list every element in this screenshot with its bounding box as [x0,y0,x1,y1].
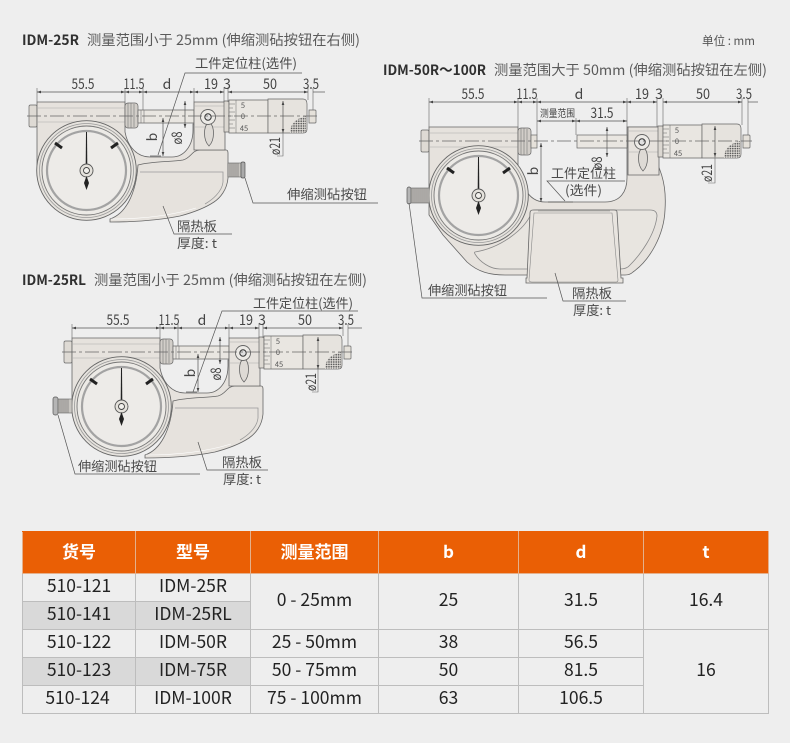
callout: heat shield: 隔热板 [177,216,217,235]
specification table: 75 - 100mm [267,685,362,710]
callout: heat shield: 厚度: t [573,300,611,319]
dimensions: 3.5 [736,84,752,104]
specification table: 25 [439,587,458,612]
dimensions: 50 [696,84,710,104]
specification table: 型号 [176,538,210,563]
callout: locating post: (选件) [565,180,602,199]
callout: retract button [409,203,547,299]
specification table: 56.5 [564,629,598,654]
diagrams: three micrometer drawings with dimensions [22,30,767,488]
dimensions: 31.5 [590,103,614,123]
dimensions: 19 [239,310,253,330]
dimensions: ø8 [587,156,607,170]
micrometer body: 5 [276,336,280,347]
specification table: 货号 [62,538,96,563]
callout: retract button: 伸缩测砧按钮 [287,184,367,203]
dimensions: 测量范围 [540,105,575,120]
specification table: IDM-75R [159,657,227,682]
callout: retract button [58,415,200,475]
dimensions: 3 [258,310,266,330]
dimensions: 50 [298,310,312,330]
dimensions [27,74,325,156]
heading: IDM-25R: 测量范围小于 25mm (伸缩测砧按钮在右侧) [87,30,360,50]
dimensions: ø21 [265,137,285,155]
dimensions: b [180,369,200,377]
specification table: 81.5 [564,657,598,682]
specification table: IDM-25RL [154,601,232,626]
callout: heat shield [555,273,626,319]
dimensions: b [142,133,162,141]
micrometer body: 45 [275,359,283,370]
micrometer body: 5 [675,125,679,136]
dimensions: 19 [635,84,649,104]
specification table: 16 [696,657,716,682]
specification table: 510-141 [47,601,111,626]
callout: locating post: 工件定位柱 [551,163,616,182]
micrometer body: 0 [675,136,679,147]
dimensions: 55.5 [106,310,130,330]
micrometer body: 45 [240,123,248,134]
specification table: d [576,538,586,563]
specification table: 38 [439,629,458,654]
unit label: 单位 : mm [702,32,755,49]
callout: heat shield: 隔热板 [572,283,612,302]
heading: IDM-50R to 100R: IDM-50R～100R [383,60,486,80]
callout: locating post [186,293,358,392]
dimensions: d [198,310,206,330]
dimensions [62,310,362,392]
callout: heat shield [198,442,268,488]
dimensions: b [523,167,543,175]
specification table: 50 [439,657,458,682]
specification table: 63 [439,685,458,710]
heading: IDM-25RL: 测量范围小于 25mm (伸缩测砧按钮在左侧) [94,270,367,290]
specification table: 510-124 [45,685,110,710]
micrometer body [29,99,316,222]
specification table: 25 - 50mm [272,629,357,654]
specification table: 510-121 [47,573,111,598]
dimensions: 3.5 [303,74,319,94]
callout: locating post: 工件定位柱(选件) [195,53,297,72]
specification table: 510-122 [47,629,111,654]
dimensions: ø8 [167,131,187,144]
dimensions: 19 [204,74,218,94]
diagram: IDM-25R [22,30,378,252]
dimensions: 11.5 [516,84,538,104]
micrometer body [407,124,750,283]
dimensions: ø8 [206,367,226,380]
diagram: IDM-25RL [22,270,367,488]
specification table: t [702,538,710,563]
dimensions: d [575,84,583,104]
specification table [22,531,769,714]
callout: locating post [150,53,302,156]
callout: retract button: 伸缩测砧按钮 [78,456,157,475]
specification table: 测量范围 [280,538,348,563]
callout: heat shield: 隔热板 [222,452,262,471]
dimensions: 55.5 [72,74,95,94]
micrometer body: 0 [241,111,245,122]
micrometer body: 5 [241,100,245,111]
callout: retract button: 伸缩测砧按钮 [428,280,507,299]
heading: IDM-25RL: IDM-25RL [22,270,86,290]
specification table: IDM-25R [159,573,227,598]
callout: heat shield [163,206,232,252]
heading: IDM-25R: IDM-25R [22,30,79,50]
dimensions: ø21 [301,373,321,391]
specification table: IDM-100R [154,685,232,710]
specification table: 31.5 [564,587,598,612]
micrometer body: 0 [276,347,280,358]
dimensions: ø21 [697,164,717,182]
callout: heat shield: 厚度: t [223,469,261,488]
specification table: IDM-50R [159,629,227,654]
heading: IDM-50R to 100R [383,60,767,80]
dimensions [419,84,758,202]
dimensions: 55.5 [462,84,485,104]
heading: IDM-50R to 100R: 测量范围大于 50mm (伸缩测砧按钮在左侧) [494,60,767,80]
micrometer body [53,335,351,458]
specification table: 16.4 [689,587,723,612]
micrometer body: 45 [674,148,682,159]
specification table: b [443,538,454,563]
specification table: 0 - 25mm [277,587,352,612]
callout: retract button [245,178,378,203]
dimensions: d [163,74,171,94]
dimensions: 3.5 [338,310,354,330]
dimensions: 50 [263,74,277,94]
dimensions: 3 [655,84,663,104]
dimensions: 3 [223,74,231,94]
specification table: 106.5 [559,685,603,710]
specification table: 510-123 [47,657,111,682]
callout: locating post: 工件定位柱(选件) [253,293,353,312]
diagram: IDM-50R to 100R [383,60,767,319]
specification table: 50 - 75mm [272,657,357,682]
callout: locating post [547,163,625,202]
dimensions: 11.5 [124,74,145,94]
dimensions: 11.5 [158,310,180,330]
callout: heat shield: 厚度: t [177,233,217,252]
